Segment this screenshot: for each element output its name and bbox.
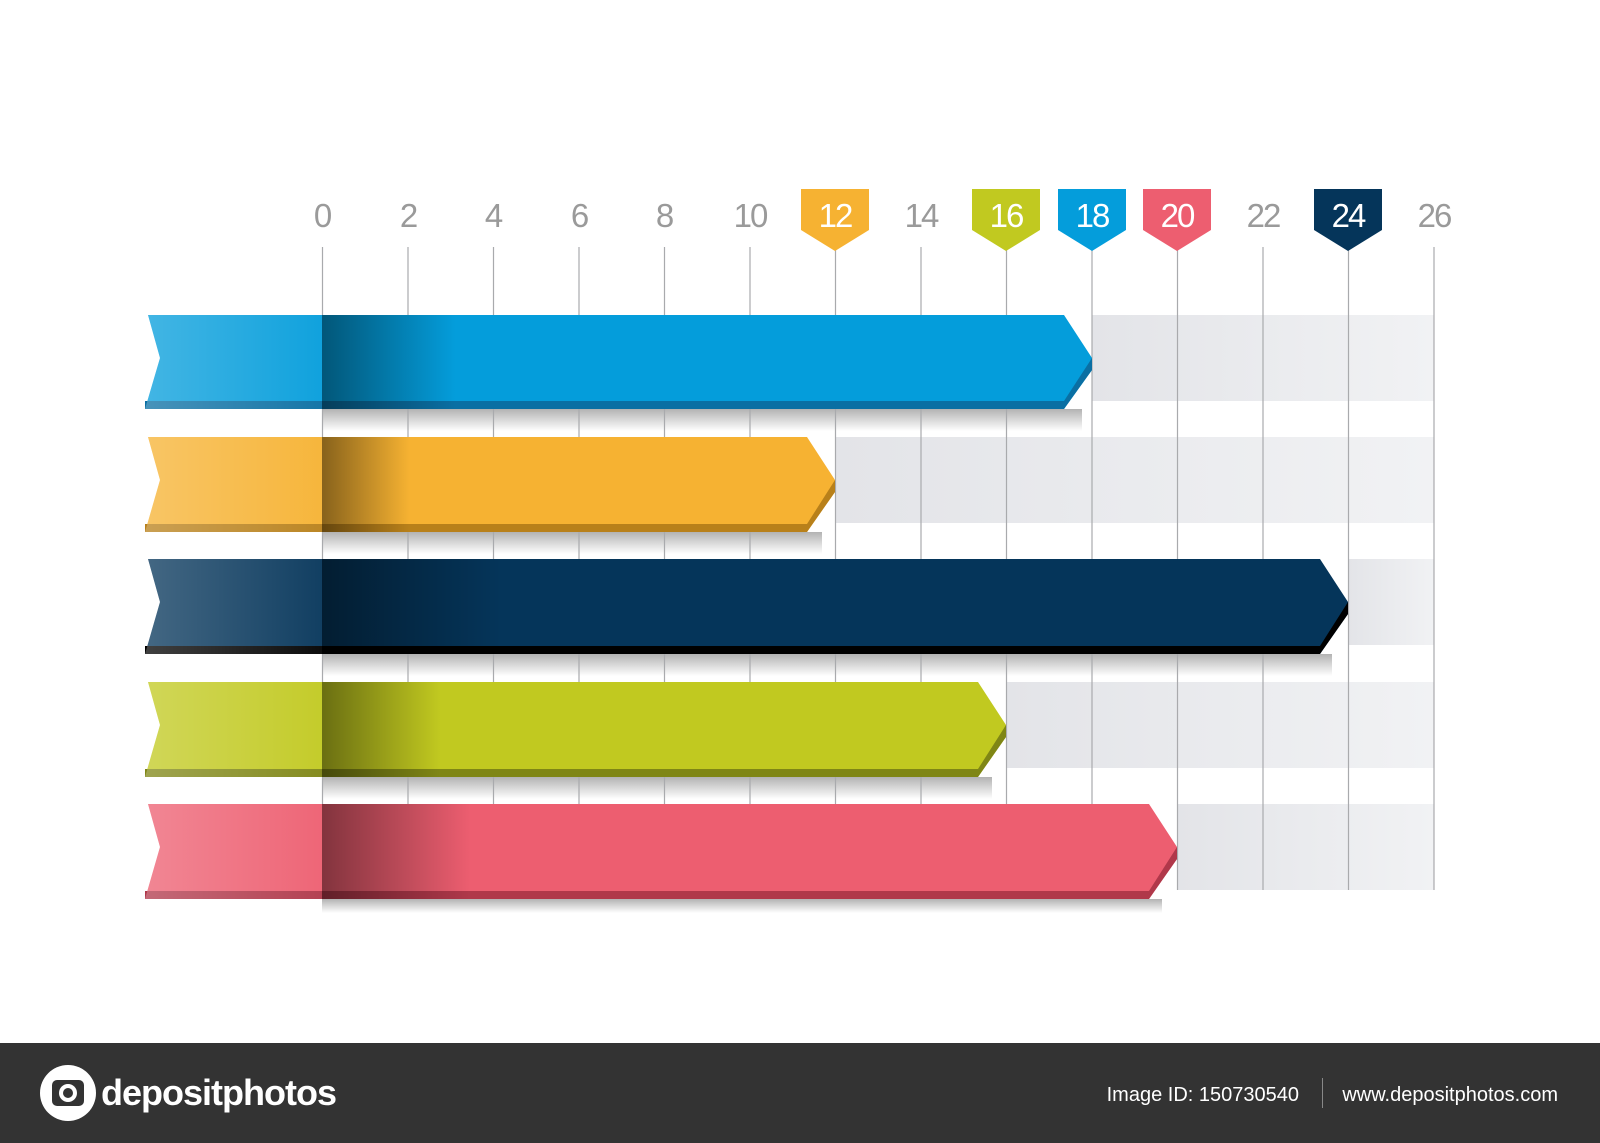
bar 1: blue 18 bbox=[145, 315, 1092, 409]
axis labels: 22 bbox=[1247, 197, 1280, 234]
tag 16 bbox=[972, 189, 1040, 251]
axis labels: 6 bbox=[571, 197, 588, 234]
bar 4: green 16 bbox=[145, 682, 1006, 777]
tag 24 bbox=[1314, 189, 1382, 251]
tag 12: 12 bbox=[819, 197, 852, 234]
shadows under bars bbox=[322, 409, 1332, 913]
image id: Image ID: 150730540 bbox=[1107, 1084, 1299, 1106]
axis labels: 14 bbox=[905, 197, 939, 234]
axis labels: 26 bbox=[1418, 197, 1451, 234]
value tags bbox=[801, 189, 1382, 251]
axis labels: 2 bbox=[400, 197, 417, 234]
axis labels: 10 bbox=[734, 197, 768, 234]
axis labels: 4 bbox=[485, 197, 503, 234]
website: www.depositphotos.com bbox=[1341, 1084, 1558, 1106]
tag 18: 18 bbox=[1076, 197, 1109, 234]
footer bar bbox=[0, 1043, 1600, 1143]
bar 3: navy 24 bbox=[145, 559, 1348, 654]
tag 16: 16 bbox=[990, 197, 1023, 234]
bar 2: orange 12 bbox=[145, 437, 835, 532]
axis tick lines bbox=[322, 247, 1434, 890]
tag 24: 24 bbox=[1332, 197, 1366, 234]
tag 20 bbox=[1143, 189, 1211, 251]
logo text: depositphotos bbox=[101, 1072, 336, 1113]
axis labels: 0 bbox=[314, 197, 332, 234]
axis labels bbox=[314, 197, 1451, 234]
tag 12 bbox=[801, 189, 869, 251]
logo icon bbox=[40, 1065, 96, 1121]
tag 18 bbox=[1058, 189, 1126, 251]
grid backgrounds bbox=[835, 315, 1434, 890]
axis labels: 8 bbox=[656, 197, 673, 234]
tag 20: 20 bbox=[1161, 197, 1195, 234]
bar 5: pink 20 bbox=[145, 804, 1177, 899]
